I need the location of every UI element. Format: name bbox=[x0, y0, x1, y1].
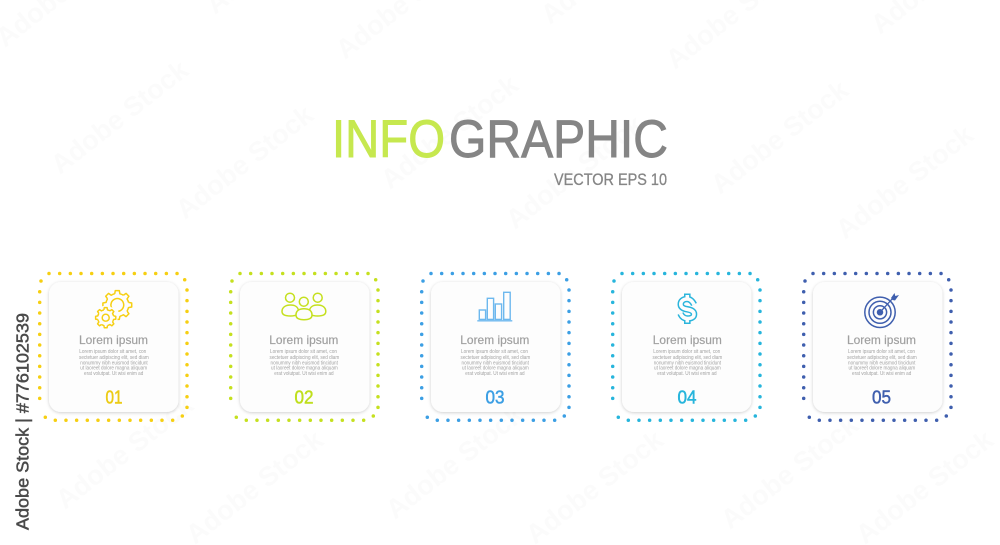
heading 2: Lorem ipsum bbox=[269, 333, 338, 347]
body text 1: Lorem ipsum dolor sit amet, con bbox=[79, 349, 147, 355]
title: INFO bbox=[332, 110, 445, 169]
icon: bar chart bbox=[477, 292, 512, 321]
body text 2 bbox=[270, 349, 339, 377]
number 03: 03 bbox=[486, 387, 504, 408]
icon: dollar sign bbox=[680, 294, 694, 324]
body text 1 bbox=[79, 349, 149, 377]
number 02: 02 bbox=[294, 387, 314, 408]
watermark pattern: Adobe Stock bbox=[500, 109, 650, 235]
watermark pattern: Adobe Stock bbox=[715, 409, 865, 535]
body text 4: Lorem ipsum dolor sit amet, con bbox=[653, 349, 721, 355]
body text 4: erat volutpat. Ut wisi enim ad bbox=[657, 371, 717, 377]
watermark pattern: Adobe Stock bbox=[705, 74, 855, 200]
body text 4: nonummy nibh euismod tincidunt bbox=[654, 360, 722, 366]
panel 5 bbox=[804, 274, 951, 420]
watermark pattern: Adobe Stock bbox=[380, 399, 530, 525]
watermark pattern: Adobe Stock bbox=[45, 54, 195, 180]
number 04: 04 bbox=[678, 387, 696, 408]
heading 1: Lorem ipsum bbox=[79, 333, 148, 347]
title bbox=[332, 110, 668, 169]
body text 1: ut laoreet dolore magna aliquam bbox=[80, 366, 147, 372]
number 01: 01 bbox=[106, 387, 122, 408]
body text 1: erat volutpat. Ut wisi enim ad bbox=[84, 371, 143, 377]
icon: gears bbox=[94, 291, 132, 330]
body text 5: sectetuer adipiscing elit, sed diam bbox=[847, 355, 917, 361]
body text 5: erat volutpat. Ut wisi enim ad bbox=[852, 371, 911, 377]
title: GRAPHIC bbox=[449, 110, 668, 169]
icon: people bbox=[282, 293, 326, 320]
body text 5: Lorem ipsum dolor sit amet, con bbox=[848, 349, 915, 355]
body text 5: nonummy nibh euismod tincidunt bbox=[848, 360, 916, 366]
body text 3: sectetuer adipiscing elit, sed diam bbox=[460, 355, 530, 361]
body text 4: ut laoreet dolore magna aliquam bbox=[654, 366, 721, 372]
heading 5: Lorem ipsum bbox=[847, 333, 916, 347]
body text 2: sectetuer adipiscing elit, sed diam bbox=[270, 355, 339, 361]
panel 3 bbox=[422, 274, 569, 420]
panel 1 bbox=[40, 274, 187, 420]
panel 2 bbox=[231, 274, 378, 420]
body text 2: nonummy nibh euismod tincidunt bbox=[270, 360, 338, 366]
body text 3: erat volutpat. Ut wisi enim ad bbox=[465, 371, 525, 377]
icon: target bbox=[865, 293, 899, 327]
panel 4 bbox=[613, 274, 760, 420]
heading 4: Lorem ipsum bbox=[653, 333, 722, 347]
body text 3: ut laoreet dolore magna aliquam bbox=[462, 366, 529, 372]
subtitle: VECTOR EPS 10 bbox=[554, 171, 667, 189]
body text 5: ut laoreet dolore magna aliquam bbox=[848, 366, 915, 372]
body text 1: nonummy nibh euismod tincidunt bbox=[80, 360, 148, 366]
heading 3: Lorem ipsum bbox=[460, 333, 529, 347]
watermark pattern: Adobe Stock bbox=[375, 69, 525, 195]
side credit: Adobe Stock | #776102539 bbox=[12, 313, 32, 530]
body text 5 bbox=[847, 349, 917, 377]
watermark pattern: Adobe Stock bbox=[50, 389, 200, 515]
watermark pattern: Adobe Stock bbox=[830, 119, 980, 245]
body text 2: ut laoreet dolore magna aliquam bbox=[271, 366, 338, 372]
body text 4: sectetuer adipiscing elit, sed diam bbox=[652, 355, 722, 361]
body text 4 bbox=[652, 349, 722, 377]
body text 3: nonummy nibh euismod tincidunt bbox=[462, 360, 529, 366]
body text 1: sectetuer adipiscing elit, sed diam bbox=[79, 355, 149, 361]
number 05: 05 bbox=[872, 387, 891, 408]
body text 3: Lorem ipsum dolor sit amet, con bbox=[461, 349, 528, 355]
body text 3 bbox=[460, 349, 530, 377]
watermark pattern: Adobe Stock bbox=[170, 99, 320, 225]
body text 2: erat volutpat. Ut wisi enim ad bbox=[274, 371, 334, 377]
body text 2: Lorem ipsum dolor sit amet, con bbox=[270, 349, 337, 355]
